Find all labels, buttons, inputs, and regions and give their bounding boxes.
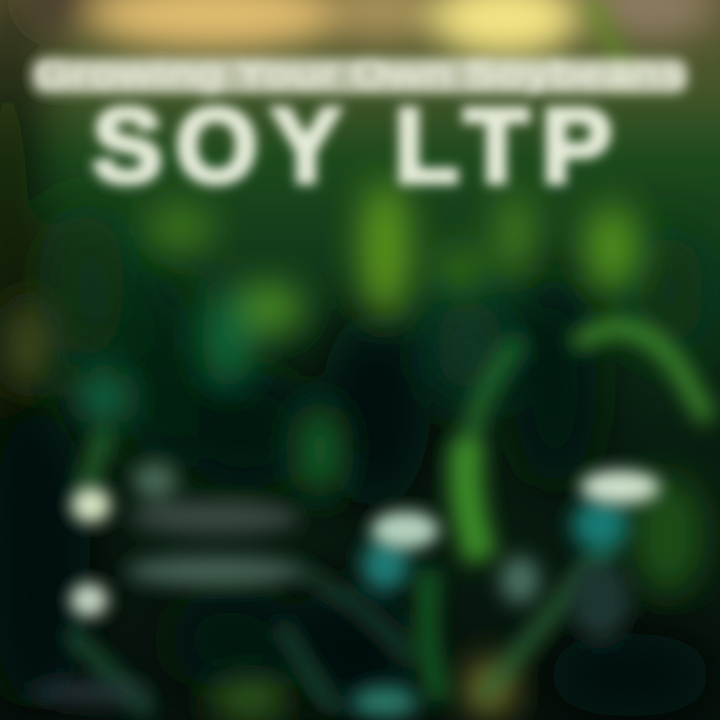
white dew droplets	[70, 470, 660, 617]
title: large blurred headline: SOY LTP	[92, 87, 612, 205]
title: small blurred headline: Growing Your Own Soybeans	[35, 52, 685, 96]
foliage highlights	[8, 180, 704, 718]
grey blurred ground band	[30, 462, 630, 718]
sunlight glow	[26, 0, 718, 58]
